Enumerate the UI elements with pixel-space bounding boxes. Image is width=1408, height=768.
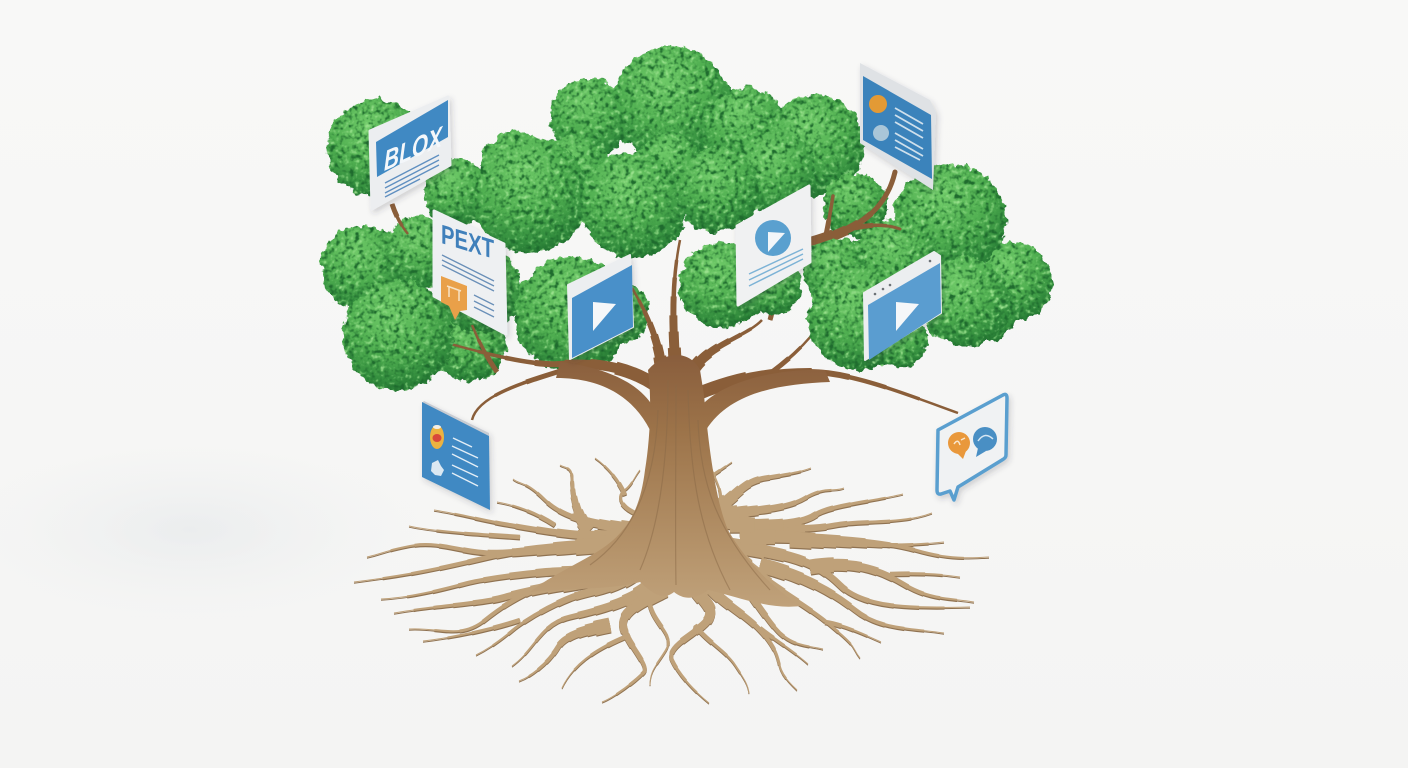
icon: orange speech bubble	[441, 276, 467, 320]
card: chat bubble	[937, 394, 1007, 500]
canopy: back foliage	[320, 46, 1052, 381]
tree	[320, 46, 1052, 704]
roots	[354, 458, 989, 704]
card: BLOX article	[370, 97, 450, 209]
icon: pie circle	[873, 125, 889, 141]
card: video left	[568, 255, 633, 359]
icon: puzzle shape	[431, 460, 444, 476]
trunk grain	[590, 380, 770, 590]
icon: orange badge	[430, 425, 444, 449]
card: PEXT document	[434, 211, 506, 334]
icon: orange speech bubble	[948, 432, 970, 459]
card: play article	[737, 186, 810, 305]
branch over foliage: upper right	[812, 172, 900, 243]
canopy: front foliage	[343, 137, 928, 390]
icon: blue speech bubble	[973, 427, 997, 457]
branches	[392, 172, 958, 420]
BLOX title: BLOX	[384, 120, 444, 178]
icon: orange circle	[869, 95, 887, 113]
icon: play circle	[755, 220, 791, 256]
PEXT title: PEXT	[441, 219, 494, 265]
trunk	[530, 355, 830, 607]
card: video right	[864, 252, 941, 360]
icon: play triangle	[896, 302, 919, 331]
card: profile bottom left	[422, 401, 490, 510]
icon: play triangle	[593, 302, 616, 331]
card: infographic top right	[860, 63, 936, 190]
